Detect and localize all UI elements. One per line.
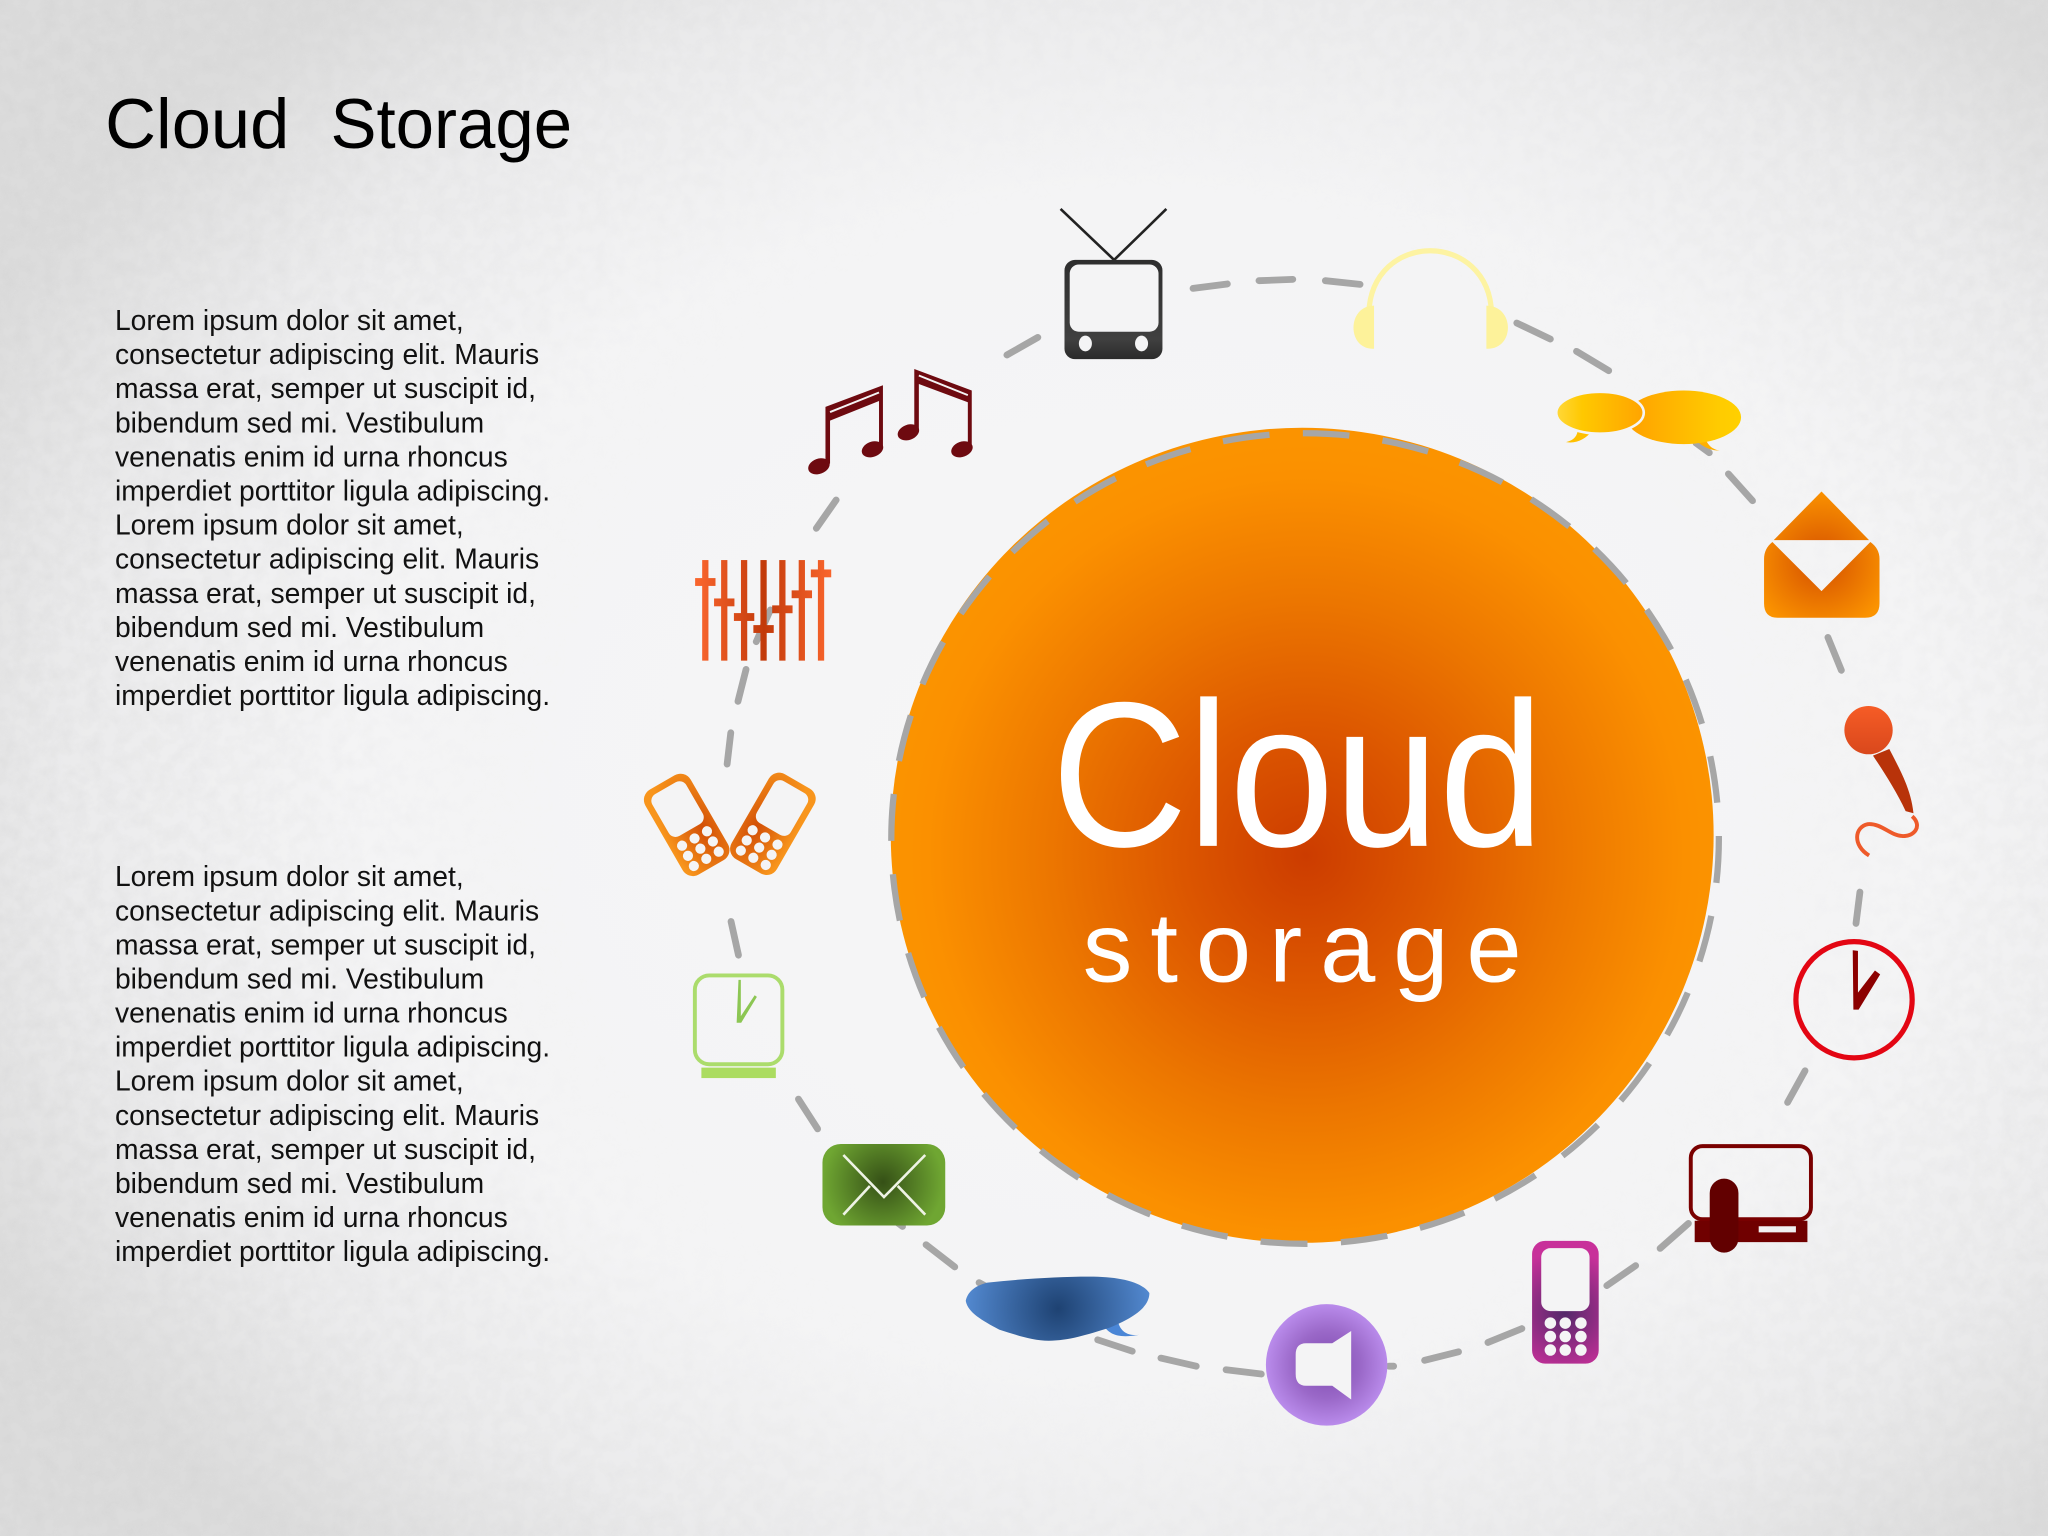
icon: open envelope bbox=[1764, 491, 1880, 618]
icon: headphones bbox=[1353, 251, 1508, 349]
icon: music notes bbox=[806, 369, 975, 477]
text block: lower paragraph: venenatis enim id urna rhoncus bbox=[115, 1201, 508, 1233]
text block: lower paragraph: imperdiet porttitor ligula adipiscing. bbox=[115, 1031, 550, 1063]
icon: orange phones pair bbox=[640, 768, 820, 880]
text block: upper paragraph: bibendum sed mi. Vestibulum bbox=[115, 406, 484, 438]
text block: upper paragraph: consectetur adipiscing elit. Mauris bbox=[115, 338, 539, 370]
text block: upper paragraph: massa erat, semper ut suscipit id, bbox=[115, 372, 536, 404]
text block: lower paragraph: venenatis enim id urna rhoncus bbox=[115, 997, 508, 1029]
text block: lower paragraph: Lorem ipsum dolor sit amet, bbox=[115, 860, 464, 892]
text block: upper paragraph: imperdiet porttitor ligula adipiscing. bbox=[115, 475, 550, 507]
icon: blue speech bubble bbox=[966, 1277, 1149, 1341]
text block: lower paragraph: consectetur adipiscing elit. Mauris bbox=[115, 1099, 539, 1131]
subheading: storage: storage bbox=[1083, 893, 1522, 1004]
icon: microphone bbox=[1844, 706, 1917, 856]
text block: lower paragraph: Lorem ipsum dolor sit amet, bbox=[115, 1065, 464, 1097]
text block: upper paragraph: Lorem ipsum dolor sit amet, bbox=[115, 509, 464, 541]
text block: upper paragraph: imperdiet porttitor ligula adipiscing. bbox=[115, 679, 550, 711]
icon: green clock bbox=[695, 975, 782, 1078]
icon: television bbox=[1061, 209, 1166, 359]
text block: upper paragraph: venenatis enim id urna rhoncus bbox=[115, 440, 508, 472]
icon: projector bbox=[1691, 1146, 1811, 1253]
icon: equalizer bbox=[695, 560, 831, 661]
icon: chat bubbles bbox=[1556, 391, 1741, 451]
icon: red clock bbox=[1796, 942, 1912, 1058]
icon: purple mobile phone bbox=[1532, 1241, 1599, 1364]
text block: upper paragraph: consectetur adipiscing elit. Mauris bbox=[115, 543, 539, 575]
text block: upper paragraph: Lorem ipsum dolor sit amet, bbox=[115, 304, 464, 336]
title: Cloud bbox=[105, 84, 289, 163]
icon: speaker bbox=[1266, 1304, 1387, 1426]
central orange circle bbox=[891, 428, 1719, 1244]
text block: upper paragraph: massa erat, semper ut suscipit id, bbox=[115, 577, 536, 609]
heading: Cloud: Cloud bbox=[1051, 659, 1544, 890]
title: Storage bbox=[330, 84, 572, 163]
inner dashed ring bbox=[891, 433, 1719, 1244]
text block: lower paragraph: massa erat, semper ut suscipit id, bbox=[115, 1133, 536, 1165]
icon: green envelope bbox=[822, 1144, 945, 1226]
text block: lower paragraph: bibendum sed mi. Vestibulum bbox=[115, 962, 484, 994]
text block: upper paragraph: bibendum sed mi. Vestibulum bbox=[115, 611, 484, 643]
text block: lower paragraph: massa erat, semper ut suscipit id, bbox=[115, 928, 536, 960]
text block: upper paragraph: venenatis enim id urna rhoncus bbox=[115, 645, 508, 677]
text block: lower paragraph: bibendum sed mi. Vestibulum bbox=[115, 1167, 484, 1199]
text block: lower paragraph: imperdiet porttitor ligula adipiscing. bbox=[115, 1235, 550, 1267]
text block: lower paragraph: consectetur adipiscing elit. Mauris bbox=[115, 894, 539, 926]
outer dashed ring bbox=[727, 279, 1860, 1374]
title bbox=[105, 84, 572, 163]
